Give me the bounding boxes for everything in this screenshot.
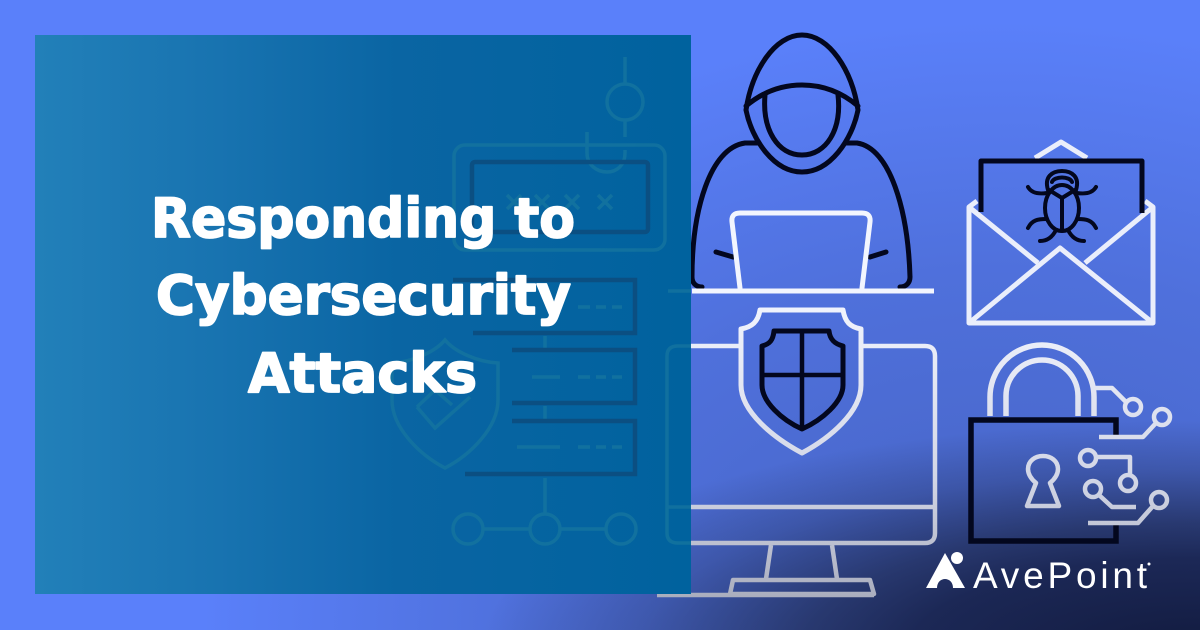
icon: circuit traces	[1080, 388, 1170, 523]
icon: padlock with circuits	[971, 345, 1170, 541]
panel: title background	[35, 35, 691, 594]
faint server illustration	[392, 57, 691, 544]
logo: AvePoint: AvePoint	[973, 555, 1148, 596]
title: Responding to	[151, 187, 575, 250]
icon: logo mark	[926, 552, 965, 588]
icon: email with bug	[969, 142, 1153, 323]
title	[151, 187, 575, 405]
icon: keyhole	[1027, 456, 1059, 506]
icon: outer shield	[741, 310, 861, 453]
icon: inner shield	[762, 331, 843, 429]
icon: hacker at laptop	[692, 35, 934, 291]
icon: monitor with shield	[657, 310, 935, 595]
icon: bug	[1028, 171, 1096, 241]
title: Attacks	[248, 342, 477, 405]
title: Cybersecurity	[156, 264, 571, 327]
